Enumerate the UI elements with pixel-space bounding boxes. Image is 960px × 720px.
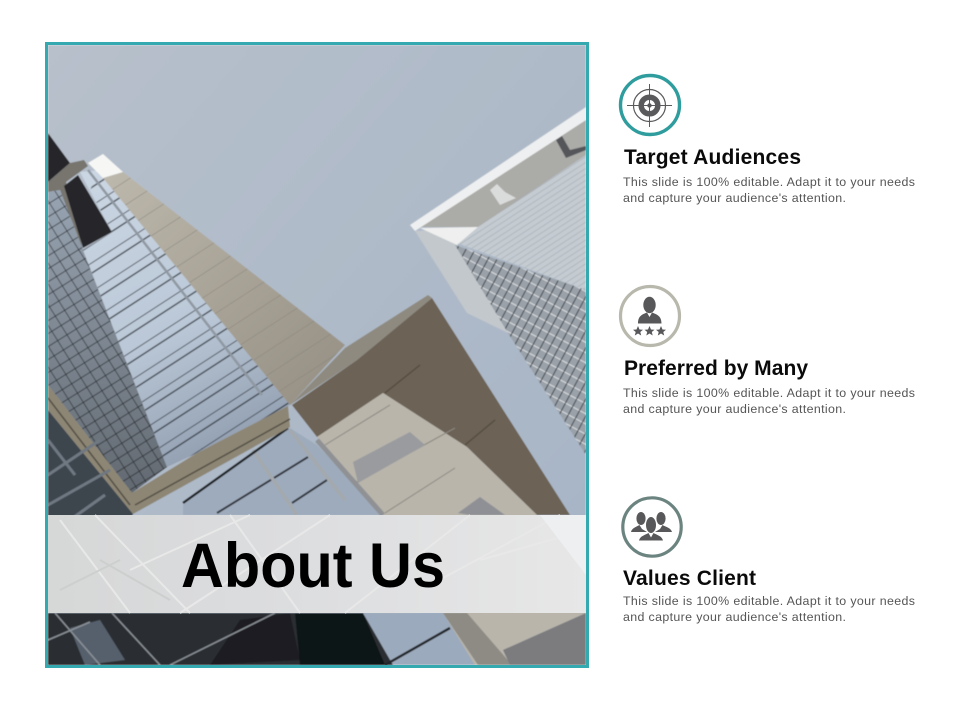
lower glass — [183, 428, 383, 515]
left grid facade — [48, 190, 167, 493]
text block: values client: and capture your audience's attention. — [623, 610, 846, 624]
text block: preferred by many — [623, 386, 915, 416]
overhang underside — [292, 298, 570, 515]
right building — [410, 107, 586, 455]
pale concrete band — [317, 393, 586, 665]
title: About Us — [181, 531, 445, 601]
concrete tower face — [103, 172, 345, 405]
text block: target audiences: and capture your audience's attention. — [623, 191, 846, 205]
icon: target — [620, 76, 680, 134]
text block: values client — [623, 594, 915, 624]
heading: target audiences: Target Audiences — [624, 146, 801, 169]
title band — [48, 515, 586, 613]
lower dark base — [48, 613, 395, 665]
about us slide — [45, 42, 914, 668]
beam — [48, 385, 290, 514]
text block: target audiences — [623, 175, 915, 205]
panel: building photo — [46, 44, 588, 666]
icon: person with stars — [620, 286, 680, 346]
glass wall — [80, 170, 290, 467]
dark upper left corner — [48, 133, 112, 250]
gray concrete patch — [503, 613, 586, 665]
text block: preferred by many: This slide is 100% editable. Adapt it to your needs — [623, 386, 915, 400]
lower left dark facade — [48, 410, 133, 520]
photo frame — [46, 44, 588, 666]
heading: preferred by many: Preferred by Many — [624, 357, 808, 380]
heading: values client: Values Client — [623, 567, 756, 590]
text block: target audiences: This slide is 100% editable. Adapt it to your needs — [623, 175, 915, 189]
lower right glass — [363, 613, 475, 665]
icon: client group — [623, 498, 681, 556]
text block: values client: This slide is 100% editable. Adapt it to your needs — [623, 594, 915, 608]
text block: preferred by many: and capture your audience's attention. — [623, 402, 846, 416]
overhang lip — [290, 295, 432, 405]
